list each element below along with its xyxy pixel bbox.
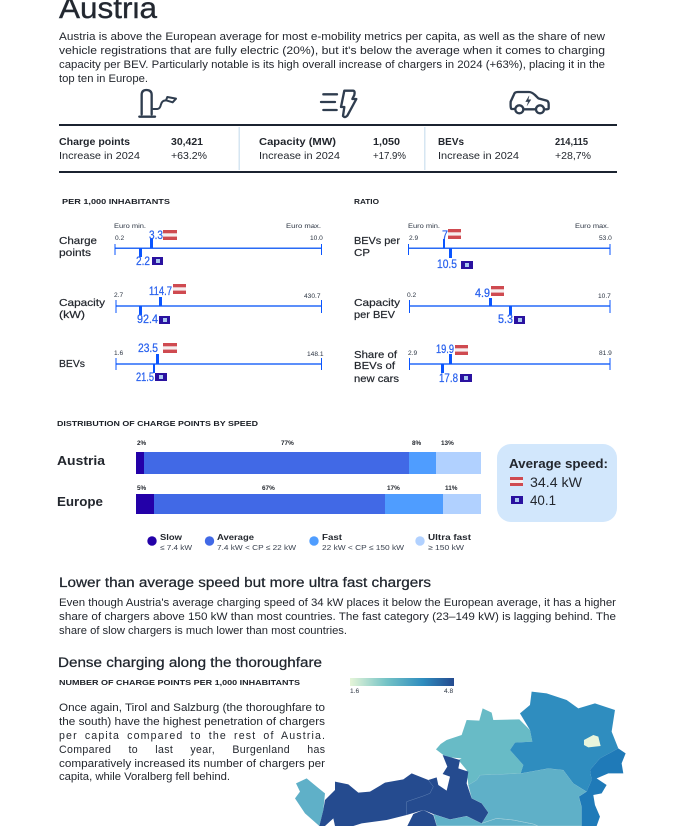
intro text bbox=[59, 31, 605, 85]
callout: average speed: 34.4 kW bbox=[530, 474, 583, 490]
range chart: BEVs: 1.6 bbox=[114, 350, 123, 357]
range chart: BEVs per CP: 53.0 bbox=[599, 235, 612, 242]
range chart: capacity: 2.7 bbox=[114, 292, 123, 299]
stat: BEVs bbox=[438, 137, 591, 162]
choropleth map of Austria bbox=[295, 692, 626, 826]
map legend: 1.6 bbox=[350, 688, 359, 695]
range chart: BEVs: 148.1 bbox=[307, 351, 324, 358]
stat: capacity: Capacity (MW) bbox=[259, 137, 336, 148]
region: Vorarlberg bbox=[295, 778, 325, 826]
region: Carinthia bbox=[433, 814, 538, 826]
legend: charging speed: ≥ 150 kW bbox=[428, 543, 464, 552]
range chart: share of BEVs of new cars: BEVs of bbox=[354, 360, 395, 372]
range chart: capacity: 114.7 bbox=[149, 286, 172, 298]
range chart: BEVs per CP: Euro max. bbox=[575, 223, 609, 230]
stacked bar: Austria bbox=[57, 440, 481, 474]
flag: Austria bbox=[455, 345, 468, 355]
legend: charging speed bbox=[147, 532, 471, 552]
flag: Europe bbox=[461, 261, 473, 269]
stat: BEVs: BEVs bbox=[438, 137, 464, 148]
stacked bar: Europe: 11% bbox=[445, 485, 458, 492]
heading: ratio: RATIO bbox=[354, 197, 379, 206]
callout: average speed: Average speed: bbox=[509, 456, 608, 471]
range chart: BEVs per CP: 2.9 bbox=[409, 235, 418, 242]
heading: per 1,000 inhabitants: PER 1,000 INHABITANTS bbox=[62, 197, 170, 206]
range chart: share of BEVs of new cars bbox=[354, 344, 612, 385]
range chart: BEVs per CP: Euro min. bbox=[408, 223, 440, 230]
legend: charging speed: 22 kW < CP ≤ 150 kW bbox=[322, 543, 404, 552]
stat: capacity: Increase in 2024 bbox=[259, 151, 340, 162]
map legend bbox=[350, 678, 454, 695]
flag: Austria bbox=[448, 229, 461, 239]
map text: comparatively increased its number of chargers per bbox=[59, 758, 326, 770]
range chart: BEVs per CP: BEVs per bbox=[354, 235, 401, 247]
range chart: charge points: 3.3 bbox=[149, 230, 163, 242]
stat: capacity: 1,050 bbox=[373, 137, 400, 148]
region: Lower Austria bbox=[510, 692, 618, 792]
range chart: charge points: 10.0 bbox=[310, 235, 323, 242]
range chart: charge points: 2.2 bbox=[136, 256, 150, 268]
stacked bar: Austria: 13% bbox=[441, 440, 454, 447]
range chart: capacity per BEV bbox=[354, 286, 611, 326]
speed text: share of slow chargers is much lower than most countries. bbox=[59, 625, 347, 637]
callout: average speed: 40.1 bbox=[530, 492, 556, 508]
map text: Once again, Tirol and Salzburg (the thoroughfare to bbox=[59, 702, 325, 714]
heading: distribution by speed: DISTRIBUTION OF CHARGE POINTS BY SPEED bbox=[57, 419, 259, 428]
region: East Tirol bbox=[407, 810, 437, 826]
map text: Compared to last year, Burgenland has bbox=[59, 744, 325, 756]
range chart: charge points: Euro min. bbox=[114, 223, 146, 230]
flag: Austria bbox=[163, 230, 177, 240]
map text: per capita compared to the rest of Austria. bbox=[59, 730, 325, 742]
flag: Austria bbox=[491, 286, 504, 296]
speed text bbox=[59, 597, 616, 637]
map text: the south) have the highest penetration of chargers bbox=[59, 716, 325, 728]
flag: Austria bbox=[163, 343, 177, 353]
range chart: capacity bbox=[59, 284, 322, 326]
legend: charging speed: Ultra fast bbox=[428, 532, 471, 542]
stat: charge points: +63.2% bbox=[171, 151, 207, 162]
icon: fast lightning bbox=[321, 91, 356, 117]
stacked bar: Austria: 8% bbox=[412, 440, 422, 447]
region: Styria bbox=[468, 768, 587, 826]
range chart: share of BEVs of new cars: 81.9 bbox=[599, 350, 612, 357]
range chart: capacity: (kW) bbox=[59, 309, 85, 321]
intro text: vehicle registrations that are fully electric (20%), but it's below the average when it comes to charging bbox=[59, 45, 605, 57]
range chart: capacity per BEV: 5.3 bbox=[498, 314, 513, 326]
icon: charging station bbox=[139, 90, 176, 117]
heading: lower than average speed: Lower than average speed but more ultra fast chargers bbox=[59, 575, 431, 591]
range chart: capacity: 92.4 bbox=[137, 314, 159, 326]
range chart: share of BEVs of new cars: Share of bbox=[354, 349, 397, 361]
stacked bar: Austria: 2% bbox=[137, 440, 147, 447]
flag: Europe bbox=[159, 316, 170, 324]
range chart: BEVs: 21.5 bbox=[136, 372, 154, 384]
legend: charging speed: Slow bbox=[160, 532, 182, 542]
callout: average speed bbox=[497, 444, 617, 522]
stacked bar: Austria: 77% bbox=[281, 440, 294, 447]
intro text: top ten in Europe. bbox=[59, 73, 148, 85]
region: Upper Austria bbox=[436, 708, 532, 785]
stat: BEVs: Increase in 2024 bbox=[438, 151, 519, 162]
range chart: charge points: points bbox=[59, 247, 91, 259]
range chart: BEVs: 23.5 bbox=[138, 343, 158, 355]
legend: charging speed: Fast bbox=[322, 532, 342, 542]
stat: capacity bbox=[259, 137, 406, 162]
region: Burgenland bbox=[579, 748, 626, 826]
stat: charge points: 30,421 bbox=[171, 137, 203, 148]
stacked bar: Austria: Austria bbox=[57, 453, 106, 468]
range chart: capacity per BEV: 10.7 bbox=[598, 293, 611, 300]
range chart: capacity per BEV: 0.2 bbox=[407, 292, 416, 299]
flag: Europe bbox=[152, 257, 163, 265]
flag: Europe bbox=[155, 373, 167, 381]
range chart: share of BEVs of new cars: new cars bbox=[354, 373, 399, 385]
stacked bar: Europe: 67% bbox=[262, 485, 275, 492]
stacked bar: Europe: Europe bbox=[57, 494, 103, 509]
range chart: share of BEVs of new cars: 2.9 bbox=[408, 350, 417, 357]
intro text: Austria is above the European average for most e-mobility metrics per capita, as well as the share of new bbox=[59, 31, 605, 43]
range chart: share of BEVs of new cars: 19.9 bbox=[436, 344, 454, 356]
stacked bar: Europe bbox=[57, 485, 481, 514]
key figures table bbox=[59, 124, 617, 173]
speed text: Even though Austria's average charging speed of 34 kW places it below the European average, it has a higher bbox=[59, 597, 616, 609]
heading: number of charge points: NUMBER OF CHARGE POINTS PER 1,000 INHABITANTS bbox=[59, 678, 300, 687]
legend: charging speed: Average bbox=[217, 532, 254, 542]
flag: Europe bbox=[460, 374, 472, 382]
range chart: BEVs per CP: 7 bbox=[442, 230, 448, 242]
stat: charge points bbox=[59, 137, 207, 162]
map legend: 4.8 bbox=[444, 688, 453, 695]
range chart: BEVs per CP: CP bbox=[354, 247, 370, 259]
stat: charge points: Charge points bbox=[59, 137, 130, 148]
stat: charge points: Increase in 2024 bbox=[59, 151, 140, 162]
stacked bar: Europe: 17% bbox=[387, 485, 400, 492]
range chart: capacity: 430.7 bbox=[304, 293, 321, 300]
region: Vienna bbox=[584, 735, 601, 747]
range chart: charge points: Charge bbox=[59, 235, 97, 247]
stat: BEVs: 214,115 bbox=[555, 137, 588, 148]
range chart: capacity: Capacity bbox=[59, 297, 106, 309]
flag: Europe bbox=[514, 316, 525, 324]
range chart: BEVs per CP bbox=[354, 223, 612, 271]
legend: charging speed: 7.4 kW < CP ≤ 22 kW bbox=[217, 543, 296, 552]
range chart: capacity per BEV: 4.9 bbox=[475, 288, 490, 300]
range chart: BEVs: BEVs bbox=[59, 358, 85, 370]
flag: Austria bbox=[173, 284, 186, 294]
stat: BEVs: +28,7% bbox=[555, 151, 591, 162]
range chart: capacity per BEV: Capacity bbox=[354, 297, 401, 309]
map text bbox=[59, 702, 326, 783]
stat: capacity: +17.9% bbox=[373, 151, 406, 162]
range chart: capacity per BEV: per BEV bbox=[354, 309, 395, 321]
range chart: BEVs per CP: 10.5 bbox=[437, 259, 457, 271]
stacked bar: Europe: 5% bbox=[137, 485, 147, 492]
range chart: BEVs bbox=[59, 343, 324, 384]
range chart: charge points bbox=[59, 223, 323, 268]
range chart: charge points: 0.2 bbox=[115, 235, 124, 242]
heading: dense charging: Dense charging along the thoroughfare bbox=[58, 655, 322, 671]
map text: capita, while Voralberg fell behind. bbox=[59, 771, 230, 783]
region: Tirol and Salzburg bbox=[319, 755, 488, 826]
range chart: charge points: Euro max. bbox=[286, 223, 321, 230]
range chart: share of BEVs of new cars: 17.8 bbox=[439, 373, 458, 385]
speed text: share of chargers above 150 kW than most countries. The fast category (23–149 kW) is lagging behind. The bbox=[59, 611, 616, 623]
icon: electric car bbox=[511, 92, 549, 113]
intro text: capacity per BEV. Particularly notable is its high overall increase of chargers in 2024 (+63%), placing it in the bbox=[59, 59, 605, 71]
legend: charging speed: ≤ 7.4 kW bbox=[160, 543, 192, 552]
